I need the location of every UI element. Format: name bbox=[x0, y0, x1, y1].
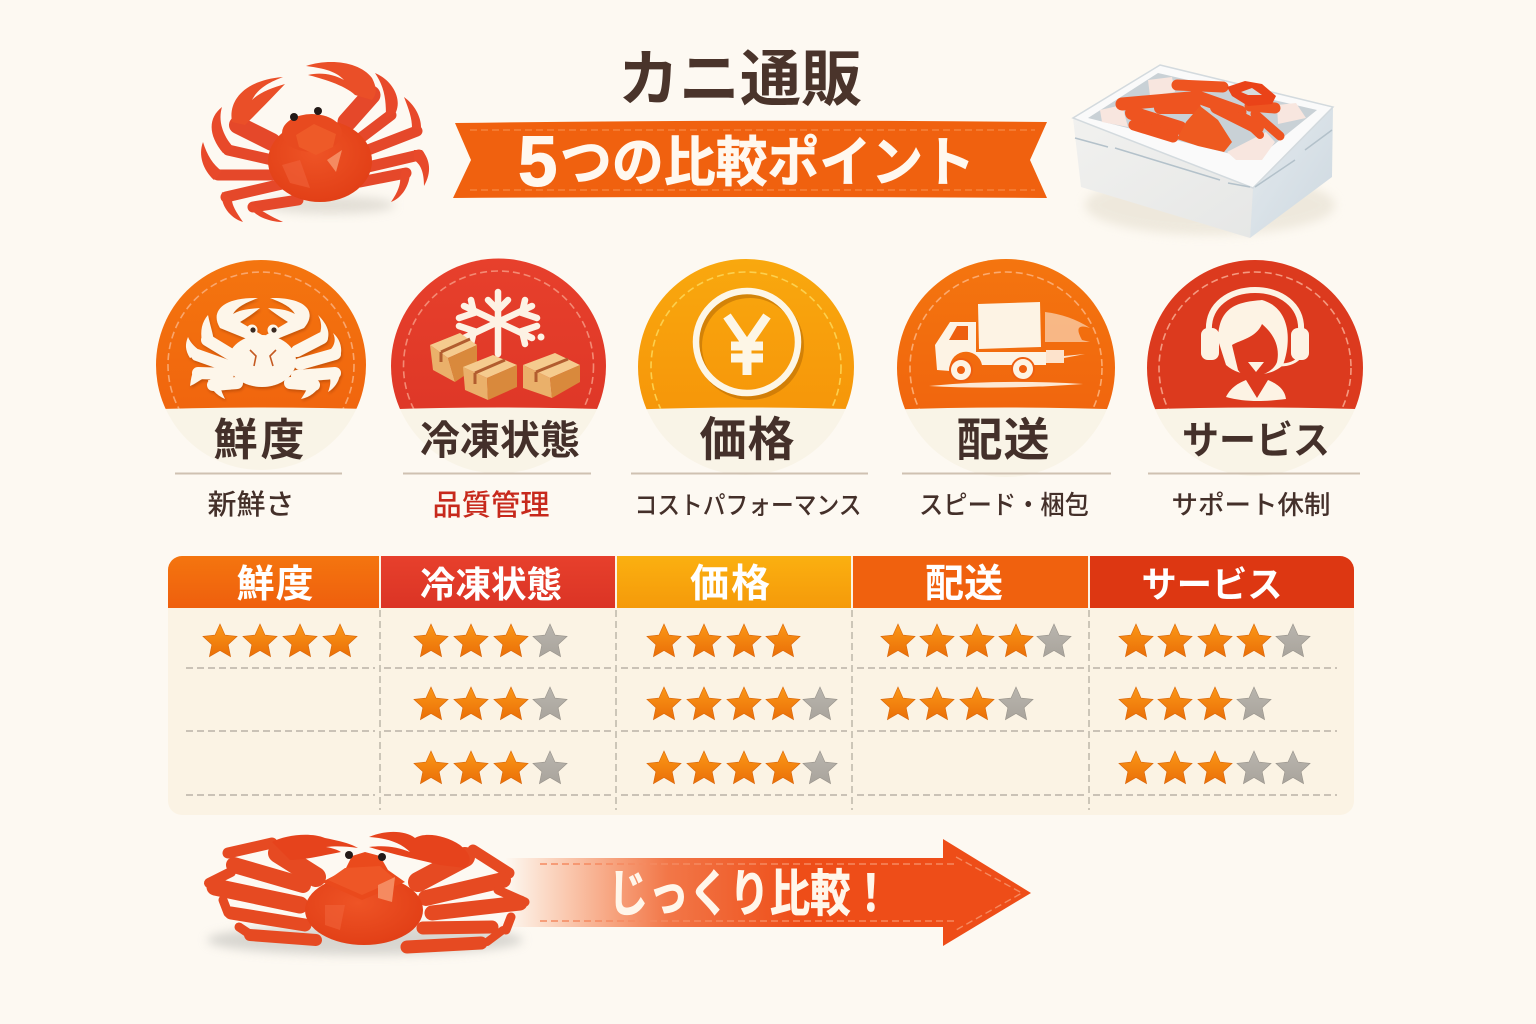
sub label: 品質管理 bbox=[432, 489, 550, 522]
heading: 配送 bbox=[956, 414, 1050, 466]
icon: delivery truck bbox=[929, 302, 1090, 388]
sub label: 新鮮さ bbox=[208, 489, 294, 520]
comparison table bbox=[168, 556, 1354, 815]
stars: 配送 bbox=[881, 624, 1071, 720]
heading: 冷凍状態 bbox=[420, 419, 580, 463]
sub label: スピード・梱包 bbox=[919, 490, 1089, 520]
table header: 冷凍状態: 冷凍状態 bbox=[420, 564, 562, 605]
panel: 冷凍状態 bbox=[391, 258, 606, 522]
stars: 鮮度 bbox=[203, 624, 357, 657]
stars: サービス bbox=[1119, 624, 1310, 784]
icon: snowflake and boxes bbox=[430, 292, 580, 400]
table header: サービス bbox=[1090, 556, 1354, 608]
styrofoam box with crab bbox=[1073, 65, 1335, 238]
banner ribbon: 5 bbox=[518, 123, 558, 202]
icon: yen coin bbox=[696, 291, 801, 397]
table header: 鮮度 bbox=[168, 556, 379, 608]
arrow: じっくり比較 bbox=[505, 839, 1031, 946]
table header: 配送 bbox=[853, 556, 1088, 608]
table header: 鮮度: 鮮度 bbox=[236, 564, 314, 606]
banner ribbon: つの比較ポイント bbox=[560, 133, 975, 193]
table header: 価格 bbox=[617, 556, 851, 608]
arrow: じっくり比較: じっくり比較！ bbox=[608, 866, 891, 922]
panel: サービス bbox=[1147, 260, 1363, 520]
sub label: サポート休制 bbox=[1172, 490, 1330, 520]
sub label: コストパフォーマンス bbox=[634, 492, 862, 520]
table header: 冷凍状態 bbox=[381, 556, 615, 608]
icon: headset operator bbox=[1201, 290, 1309, 401]
icon: white crab bbox=[186, 298, 341, 399]
heading: 価格 bbox=[700, 413, 794, 466]
table header: サービス: サービス bbox=[1142, 564, 1282, 605]
banner ribbon bbox=[453, 121, 1047, 202]
panel: 配送 bbox=[897, 259, 1115, 520]
heading: 鮮度 bbox=[214, 416, 304, 465]
crab illustration: top left bbox=[201, 62, 429, 222]
title: カニ通販 bbox=[618, 45, 862, 113]
table header: 配送: 配送 bbox=[925, 563, 1003, 606]
panel: 鮮度 bbox=[156, 260, 366, 520]
table header: 価格: 価格 bbox=[690, 563, 770, 606]
stars: 価格 bbox=[647, 624, 837, 784]
panel: 価格 bbox=[631, 259, 868, 520]
crab illustration: bottom left bbox=[207, 832, 525, 955]
heading: サービス bbox=[1182, 420, 1330, 463]
stars: 冷凍状態 bbox=[414, 624, 567, 784]
